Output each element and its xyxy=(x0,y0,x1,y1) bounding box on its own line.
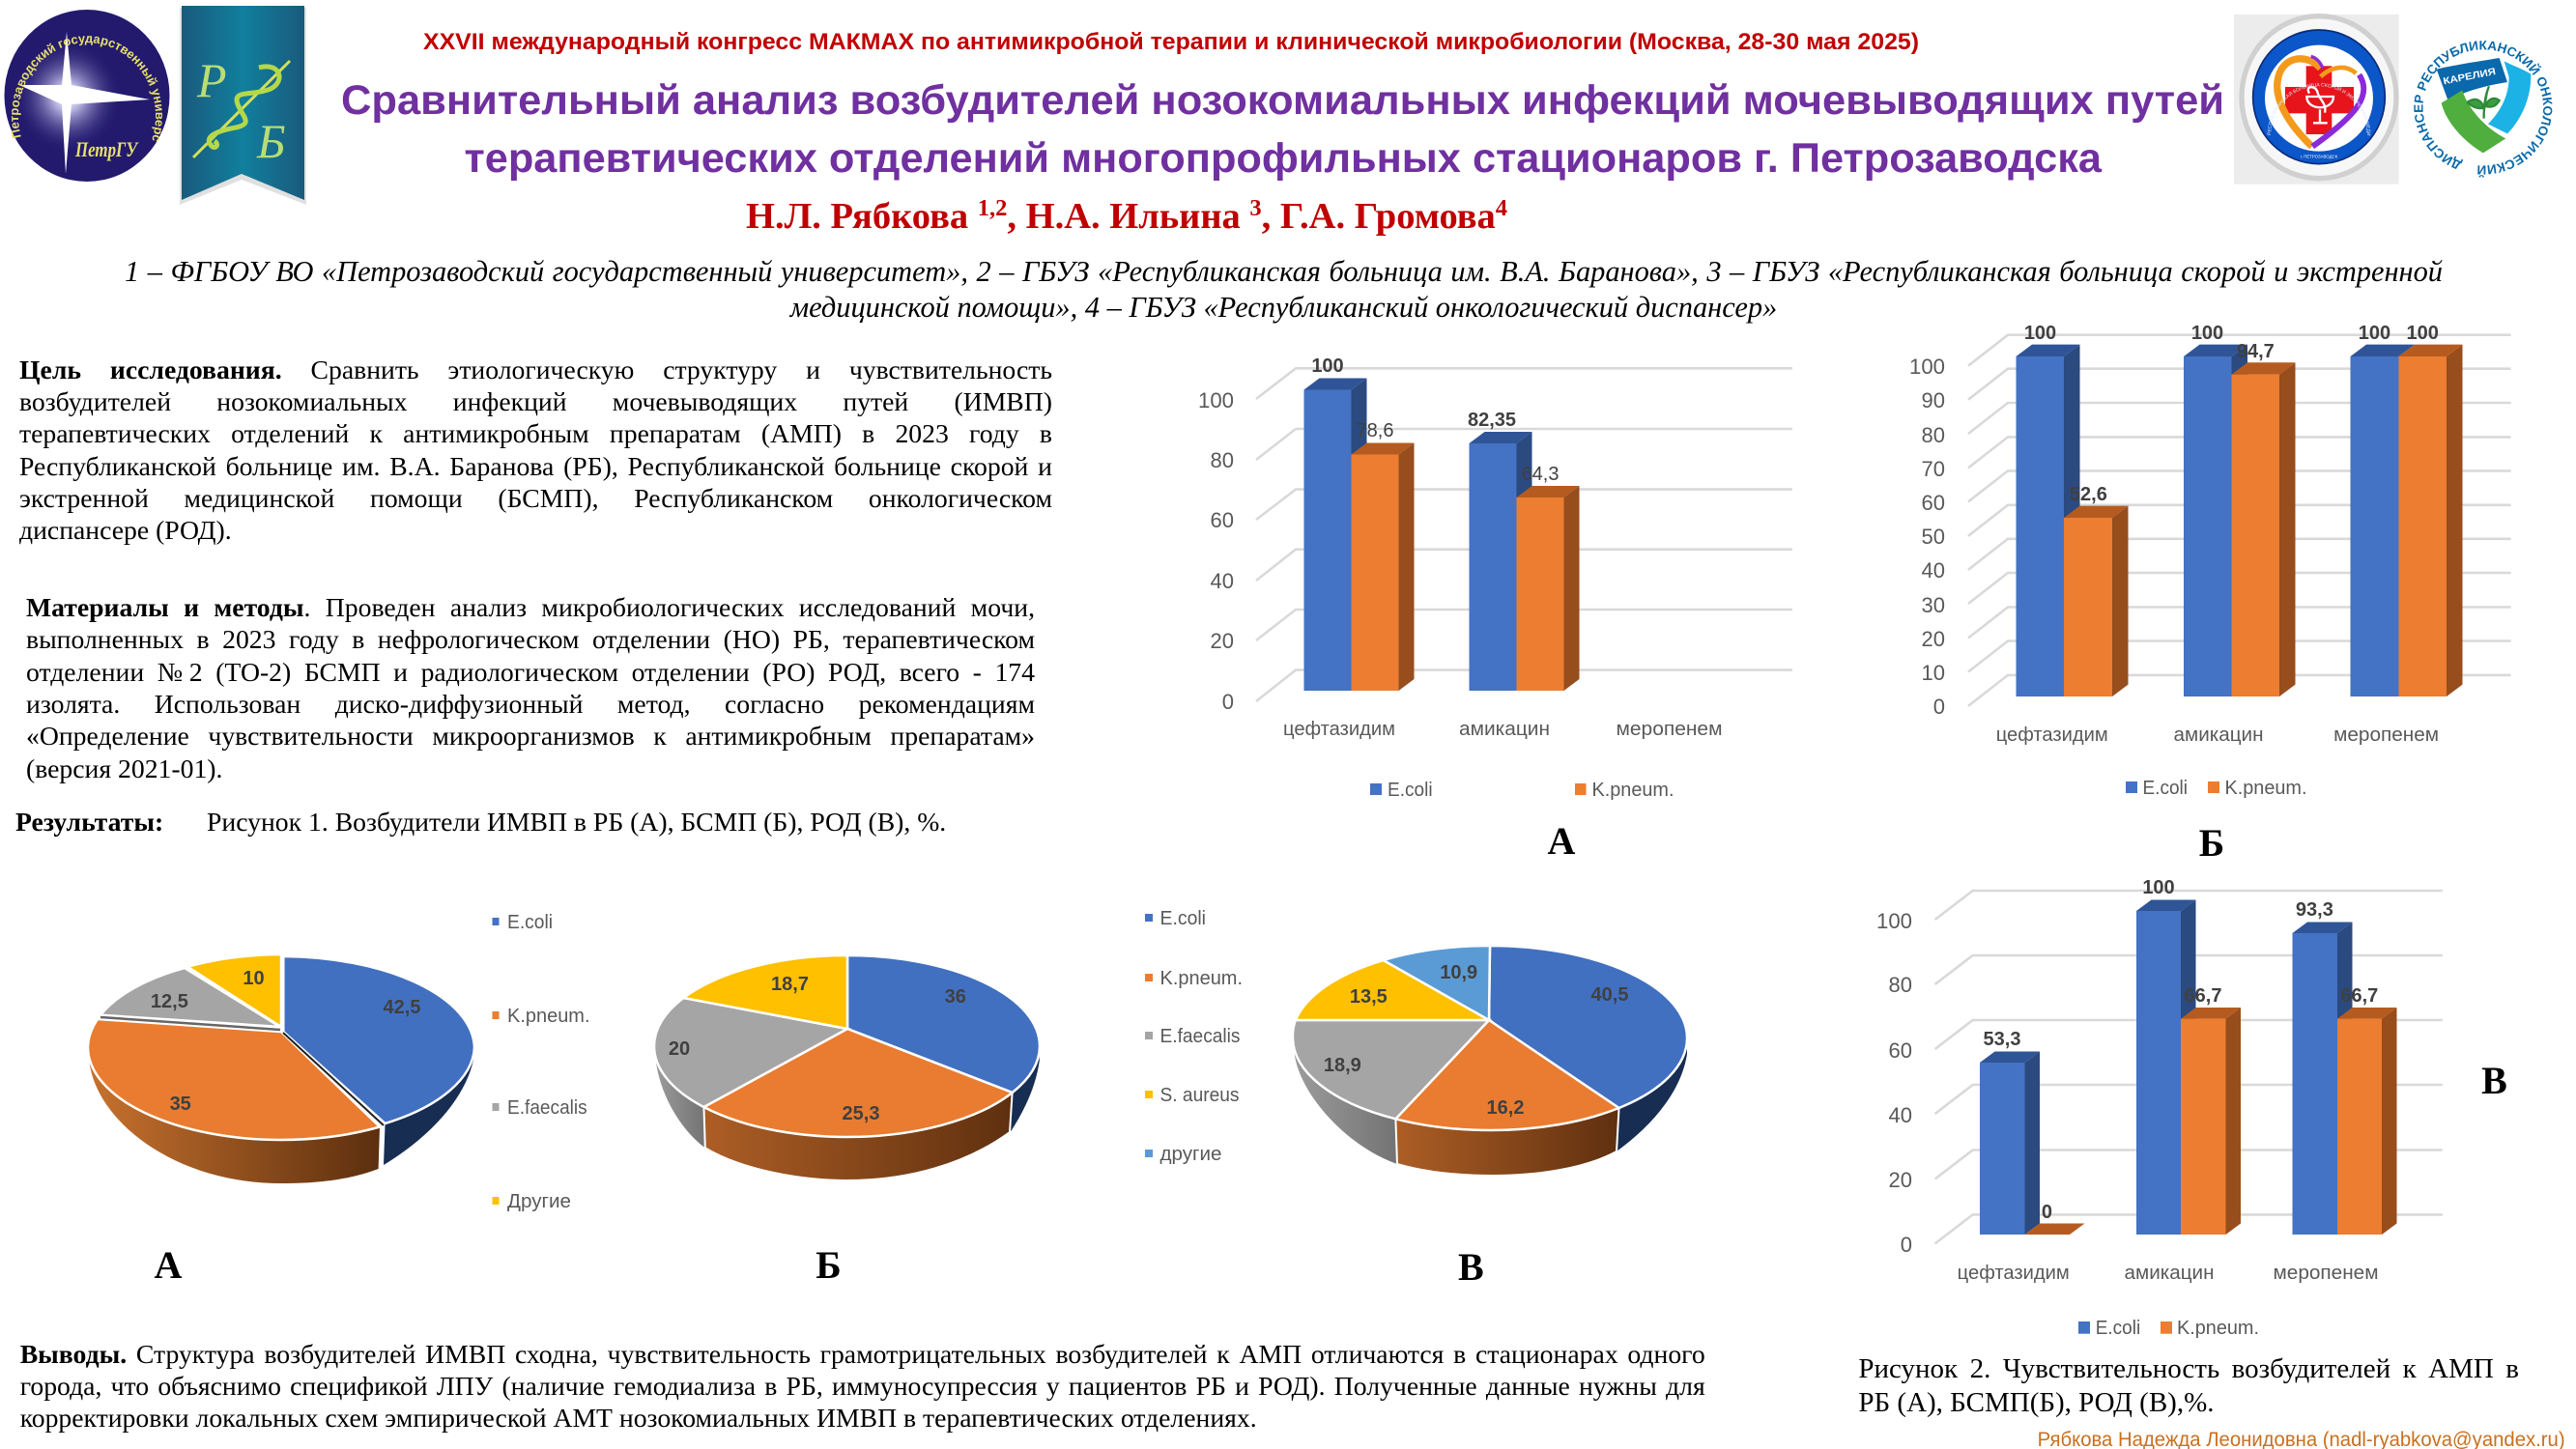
axis labels C: 40 xyxy=(1889,1103,1912,1127)
pie letter A: А xyxy=(155,1243,183,1287)
text block: study aim xyxy=(19,355,1052,545)
heading: results and figure 1 caption: Результаты: xyxy=(15,807,163,837)
legend C: K.pneum. xyxy=(2177,1318,2259,1339)
category labels B: амикацин xyxy=(2174,724,2263,746)
pie C values: 18,9 xyxy=(1324,1055,1361,1076)
chart letter C: В xyxy=(2481,1059,2507,1102)
axis labels C: 80 xyxy=(1889,973,1912,997)
axis labels B: 30 xyxy=(1922,593,1945,617)
axis labels A: 100 xyxy=(1198,388,1234,412)
logo: RB ribbon: Б xyxy=(256,114,286,168)
legend C xyxy=(2078,1318,2259,1339)
pie C legend: E.coli xyxy=(1159,908,1206,929)
text block: materials and methods: Материалы и методы. Проведен анализ микробиологических исследований мочи, xyxy=(26,592,1035,622)
data labels B: 100 xyxy=(2359,323,2390,344)
logo: RB ribbon: Р xyxy=(196,53,227,107)
text block: materials and methods: изолята. Использован диско-диффузионный метод, согласно рекомендациям xyxy=(26,689,1035,719)
pie C legend: S. aureus xyxy=(1159,1085,1239,1106)
legend B: K.pneum. xyxy=(2224,778,2307,799)
data labels C: 53,3 xyxy=(1984,1029,2020,1050)
data labels A: 82,35 xyxy=(1468,410,1516,431)
axis labels C: 100 xyxy=(1876,909,1912,933)
axis labels A xyxy=(1198,388,1234,714)
data labels C: 66,7 xyxy=(2340,985,2378,1007)
authors: , Г.А. Громова xyxy=(1262,196,1496,237)
text block: conclusions xyxy=(20,1339,1705,1433)
category labels B: меропенем xyxy=(2333,724,2439,746)
bar chart C xyxy=(1876,877,2443,1339)
pie B values: 20 xyxy=(669,1038,690,1060)
affiliations: медицинской помощи», 4 – ГБУЗ «Республиканский онкологический диспансер» xyxy=(790,290,1777,323)
bars A xyxy=(1304,379,1579,691)
legend C: E.coli xyxy=(2096,1318,2140,1339)
data labels C: 66,7 xyxy=(2185,985,2221,1007)
category labels C xyxy=(1958,1263,2379,1284)
logo: RB ribbon xyxy=(180,6,306,205)
data labels B: 100 xyxy=(2191,323,2223,344)
axis labels A: 60 xyxy=(1211,508,1234,532)
legend A xyxy=(1370,780,1674,801)
text block: study aim: диспансере (РОД). xyxy=(19,515,232,545)
axis labels B: 70 xyxy=(1922,457,1945,481)
pie C legend xyxy=(1145,908,1243,1165)
category labels A: меропенем xyxy=(1616,719,1722,740)
data labels B xyxy=(2024,323,2439,505)
pie B faces xyxy=(654,955,1040,1137)
legend B xyxy=(2126,778,2307,799)
text block: materials and methods: (версия 2021-01). xyxy=(26,753,222,783)
chart letter A: А xyxy=(1548,819,1576,863)
pie A values: 42,5 xyxy=(384,997,420,1018)
axis labels B: 50 xyxy=(1922,525,1945,549)
text block: materials and methods: выполненных в 2023 году в нефрологическом отделении (НО) РБ, терапевтическом xyxy=(26,624,1035,654)
pie A legend: Другие xyxy=(507,1191,571,1212)
pie A legend: E.faecalis xyxy=(507,1097,587,1119)
category labels C: амикацин xyxy=(2124,1263,2215,1284)
data labels C xyxy=(1984,877,2378,1223)
axis labels B: 20 xyxy=(1922,627,1945,651)
data labels B: 100 xyxy=(2407,323,2439,344)
heading: results and figure 1 caption: Рисунок 1. Возбудители ИМВП в РБ (А), БСМП (Б), РОД (В), %. xyxy=(207,807,946,837)
logo: emergency hospital badge: РЕСПУБЛИКАНСКАЯ БОЛЬНИЦА СКОРОЙ И ЭКСТРЕННОЙ МЕДИЦИНСКОЙ ПОМОЩИ xyxy=(2267,83,2371,135)
axis labels A: 0 xyxy=(1222,690,1234,714)
data labels B: 94,7 xyxy=(2237,341,2275,362)
axis labels B: 90 xyxy=(1922,388,1945,412)
axis labels B: 40 xyxy=(1922,558,1945,582)
title line 2: терапевтических отделений многопрофильных стационаров г. Петрозаводска xyxy=(464,135,2103,182)
gridlines A xyxy=(1256,368,1792,701)
pie C faces xyxy=(1293,946,1687,1130)
axis labels B: 60 xyxy=(1922,491,1945,515)
authors: Н.Л. Рябкова xyxy=(746,196,968,237)
figure 2 caption: РБ (А), БСМП(Б), РОД (В),%. xyxy=(1858,1387,2215,1418)
pie B values: 18,7 xyxy=(771,974,809,995)
pie A legend xyxy=(493,912,589,1212)
figure 2 caption: Рисунок 2. Чувствительность возбудителей к АМП в xyxy=(1858,1353,2519,1384)
pie C values: 16,2 xyxy=(1487,1097,1524,1119)
axis labels B: 80 xyxy=(1922,423,1945,447)
logo: emergency hospital badge xyxy=(2234,14,2399,184)
data labels C: 0 xyxy=(2042,1202,2052,1223)
logo: Karelia oncology dispensary: ДИСПАНСЕР РЕСПУБЛИКАНСКИЙ ОНКОЛОГИЧЕСКИЙ xyxy=(2414,41,2553,178)
axis labels A: 40 xyxy=(1211,569,1234,593)
axis labels C: 0 xyxy=(1901,1233,1912,1257)
congress heading: XXVII международный конгресс МАКМАХ по антимикробной терапии и клинической микробиологии (Москва, 28-30 мая 2025) xyxy=(423,29,1919,55)
bars B xyxy=(2016,345,2462,696)
pie chart C xyxy=(1293,946,1687,1176)
data labels A: 78,6 xyxy=(1357,420,1393,441)
authors: 1,2 xyxy=(978,195,1007,221)
legend A: K.pneum. xyxy=(1592,780,1674,801)
text block: study aim: Цель исследования. Сравнить этиологическую структуру и чувствительность xyxy=(19,355,1052,384)
title line 1: Сравнительный анализ возбудителей нозокомиальных инфекций мочевыводящих путей xyxy=(341,77,2224,124)
pie A values: 12,5 xyxy=(151,991,188,1012)
axis labels C xyxy=(1876,909,1912,1257)
data labels B: 100 xyxy=(2024,323,2056,344)
authors: 4 xyxy=(1496,195,1507,221)
pie B sides xyxy=(654,1046,1040,1180)
text block: materials and methods: «Определение чувствительности микроорганизмов к антимикробным препаратам» xyxy=(26,721,1035,751)
data labels C: 100 xyxy=(2142,877,2175,898)
data labels A xyxy=(1311,355,1559,485)
pie A values: 10 xyxy=(243,968,265,989)
logo: Karelia oncology dispensary: КАРЕЛИЯ xyxy=(2443,67,2497,87)
category labels B xyxy=(1996,724,2439,746)
pie A legend: K.pneum. xyxy=(507,1006,589,1027)
axis labels B: 100 xyxy=(1909,355,1945,379)
text block: materials and methods: отделении №2 (ТО-2) БСМП и радиологическом отделении (РО) РОД, всего - 174 xyxy=(26,657,1035,686)
text block: study aim: Республиканской больнице им. В.А. Баранова (РБ), Республиканской больнице скорой и xyxy=(19,451,1052,481)
text block: conclusions: корректировки локальных схем эмпирической АМТ нозокомиальных ИМВП в терапевтических отделениях. xyxy=(20,1403,1257,1433)
text block: study aim: возбудителей нозокомиальных инфекций мочевыводящих путей (ИМВП) xyxy=(19,386,1052,416)
data labels B: 52,6 xyxy=(2070,484,2107,505)
pie A values xyxy=(151,968,420,1115)
pie C values: 13,5 xyxy=(1350,986,1388,1008)
gridlines C xyxy=(1935,891,2443,1243)
axis labels A: 80 xyxy=(1211,448,1234,472)
legend A: E.coli xyxy=(1388,780,1433,801)
category labels C: цефтазидим xyxy=(1958,1263,2070,1284)
pie chart A xyxy=(88,954,474,1183)
pie C sides xyxy=(1293,1037,1687,1176)
pie A sides xyxy=(88,1047,474,1183)
pie C legend: другие xyxy=(1159,1144,1221,1165)
pie B values: 25,3 xyxy=(843,1103,879,1124)
pie A legend: E.coli xyxy=(507,912,553,933)
bar chart B xyxy=(1909,323,2511,799)
category labels C: меропенем xyxy=(2273,1263,2379,1284)
pie C legend: E.faecalis xyxy=(1159,1026,1241,1047)
legend B: E.coli xyxy=(2143,778,2188,799)
pie C legend: K.pneum. xyxy=(1159,968,1243,989)
category labels A: амикацин xyxy=(1459,719,1550,740)
figure 2 caption xyxy=(1858,1353,2519,1418)
logo: emergency hospital badge: г. ПЕТРОЗАВОДСК xyxy=(2301,154,2338,158)
text block: study aim: терапевтических отделений к антимикробным препаратам (АМП) в 2023 году в xyxy=(19,418,1052,448)
pie A values: 35 xyxy=(170,1094,191,1115)
gridlines B xyxy=(1968,335,2511,706)
category labels A: цефтазидим xyxy=(1283,719,1395,740)
chart letter B: Б xyxy=(2199,821,2224,865)
bars C xyxy=(1980,900,2396,1235)
affiliations: 1 – ФГБОУ ВО «Петрозаводский государственный университет», 2 – ГБУЗ «Республиканская больница им. В.А. Баранова», 3 – ГБУЗ «Республиканская больница скорой и экстренной xyxy=(125,255,2443,288)
text block: conclusions: города, что объяснимо спецификой ЛПУ (наличие гемодиализа в РБ, иммуносупрессия у пациентов РБ и РОД). Полученные данные нужны для xyxy=(20,1371,1705,1401)
pie B values: 36 xyxy=(945,986,966,1008)
axis labels C: 20 xyxy=(1889,1168,1912,1192)
data labels A: 100 xyxy=(1311,355,1344,377)
data labels C: 93,3 xyxy=(2296,899,2333,921)
axis labels B xyxy=(1909,355,1945,719)
pie letter B: Б xyxy=(816,1243,842,1287)
authors: 3 xyxy=(1249,195,1262,221)
axis labels A: 20 xyxy=(1211,629,1234,653)
pie C values: 40,5 xyxy=(1591,984,1628,1006)
text block: study aim: экстренной медицинской помощи (БСМП), Республиканском онкологическом xyxy=(19,483,1052,513)
pie A faces xyxy=(88,954,474,1140)
authors: , Н.А. Ильина xyxy=(1007,196,1249,237)
category labels B: цефтазидим xyxy=(1996,724,2108,746)
logo: Petrozavodsk State University: ПетрГУ xyxy=(74,137,139,161)
pie chart B xyxy=(654,955,1040,1180)
bar chart A xyxy=(1198,355,1792,801)
axis labels B: 0 xyxy=(1933,695,1945,719)
pie C values: 10,9 xyxy=(1440,962,1477,983)
text block: materials and methods xyxy=(26,592,1035,783)
axis labels C: 60 xyxy=(1889,1038,1912,1063)
text block: conclusions: Выводы. Структура возбудителей ИМВП сходна, чувствительность грамотрицательных возбудителей к АМП отличаются в стационарах одного xyxy=(20,1339,1705,1369)
affiliations xyxy=(125,255,2443,323)
pie letter C: В xyxy=(1458,1245,1484,1289)
axis labels B: 10 xyxy=(1922,661,1945,685)
category labels A xyxy=(1283,719,1722,740)
pie B values xyxy=(669,974,966,1124)
data labels A: 64,3 xyxy=(1522,464,1559,485)
pie C values xyxy=(1324,962,1628,1119)
